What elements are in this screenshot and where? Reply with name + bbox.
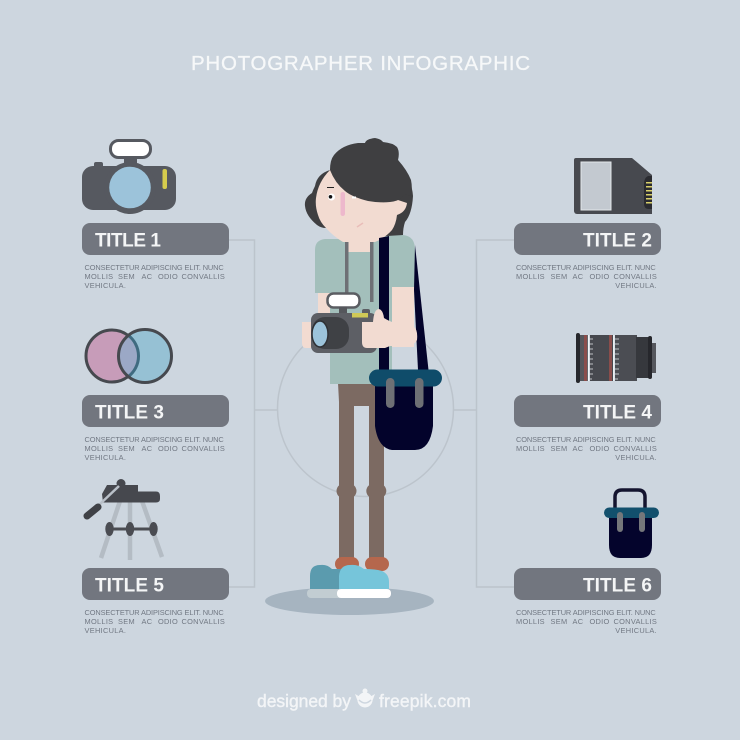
text block 2: CONSECTETUR ADIPISCING ELIT. NUNC: [516, 263, 656, 272]
text block 6: AC: [572, 617, 584, 626]
title: PHOTOGRAPHER INFOGRAPHIC: [191, 52, 530, 75]
text block 1: [84, 263, 225, 290]
text block 5: AC: [142, 617, 153, 626]
text block 3: VEHICULA.: [84, 453, 126, 462]
text block 2: AC: [572, 272, 584, 281]
camera straps: [345, 242, 374, 302]
icon: lens: [576, 333, 656, 383]
footer credit: designed by: [257, 691, 351, 711]
text block 1: AC: [142, 272, 153, 281]
text block 3: [84, 435, 225, 462]
body camera: [311, 294, 377, 353]
pill: title 5: [82, 568, 229, 600]
text block 2: [516, 263, 657, 290]
text block 1: CONVALLIS: [182, 272, 225, 281]
pill: title 1: [82, 223, 229, 255]
pill: title 4: [514, 395, 661, 427]
shirt: [315, 235, 415, 384]
pill: title 4: TITLE 4: [583, 402, 652, 424]
icon: freepik mascot: [355, 688, 375, 708]
text block 1: CONSECTETUR ADIPISCING ELIT. NUNC: [84, 263, 224, 272]
text block 4: CONVALLIS: [614, 444, 657, 453]
hair top: [330, 138, 412, 202]
text block 3: AC: [142, 444, 153, 453]
footer credit: [257, 688, 471, 711]
text block 5: ODIO: [158, 617, 178, 626]
text block 6: CONSECTETUR ADIPISCING ELIT. NUNC: [516, 608, 656, 617]
text block 4: [516, 435, 657, 462]
text block 2: ODIO: [590, 272, 610, 281]
hair back: [305, 150, 413, 240]
text block 4: MOLLIS: [516, 444, 545, 453]
pill: title 3: TITLE 3: [95, 402, 164, 424]
text block 1: ODIO: [158, 272, 178, 281]
text block 6: CONVALLIS: [614, 617, 657, 626]
text block 5: MOLLIS: [84, 617, 113, 626]
ground shadow: [265, 587, 434, 615]
text block 5: [84, 608, 225, 635]
footer credit: freepik.com: [379, 691, 471, 711]
neck: [345, 236, 372, 252]
arms: [318, 285, 334, 320]
text block 1: VEHICULA.: [84, 281, 126, 290]
text block 5: CONVALLIS: [182, 617, 225, 626]
text block 6: VEHICULA.: [615, 626, 657, 635]
pill: title 1: TITLE 1: [95, 230, 161, 252]
text block 2: VEHICULA.: [615, 281, 657, 290]
icon: filters: [86, 330, 172, 382]
text block 3: MOLLIS: [84, 444, 113, 453]
hands: [302, 322, 311, 348]
text block 5: CONSECTETUR ADIPISCING ELIT. NUNC: [84, 608, 224, 617]
pill: title 2: [514, 223, 661, 255]
pill: title 6: [514, 568, 661, 600]
text block 3: CONSECTETUR ADIPISCING ELIT. NUNC: [84, 435, 224, 444]
icon: tripod: [87, 479, 162, 560]
icon: memory card: [574, 158, 652, 214]
text block 3: CONVALLIS: [182, 444, 225, 453]
text block 6: MOLLIS: [516, 617, 545, 626]
text block 4: CONSECTETUR ADIPISCING ELIT. NUNC: [516, 435, 656, 444]
photographer figure: [265, 138, 442, 615]
face: [316, 170, 407, 242]
connector lines and circle: [229, 240, 514, 587]
shoulder strap: [379, 236, 389, 370]
eyes: [327, 188, 356, 200]
shoes: [310, 565, 342, 589]
text block 5: SEM: [118, 617, 135, 626]
pill: title 6: TITLE 6: [583, 576, 652, 596]
text block 3: SEM: [118, 444, 135, 453]
text block 5: VEHICULA.: [84, 626, 126, 635]
socks: [335, 557, 359, 571]
pill: title 2: TITLE 2: [583, 230, 652, 252]
text block 1: MOLLIS: [84, 272, 113, 281]
text block 4: AC: [572, 444, 584, 453]
text block 3: ODIO: [158, 444, 178, 453]
shoulder bag: [369, 370, 442, 450]
pill: title 3: [82, 395, 229, 427]
nose and mouth: [340, 192, 345, 216]
text block 6: [516, 608, 657, 635]
text block 4: ODIO: [590, 444, 610, 453]
pill: title 5: TITLE 5: [95, 576, 164, 596]
icon: bag: [604, 490, 659, 558]
text block 4: SEM: [550, 444, 567, 453]
text block 2: SEM: [550, 272, 567, 281]
text block 4: VEHICULA.: [615, 453, 657, 462]
text block 2: MOLLIS: [516, 272, 545, 281]
text block 1: SEM: [118, 272, 135, 281]
text block 2: CONVALLIS: [614, 272, 657, 281]
icon: camera: [82, 140, 176, 214]
text block 6: ODIO: [590, 617, 610, 626]
text block 6: SEM: [550, 617, 567, 626]
legs: [338, 383, 384, 562]
